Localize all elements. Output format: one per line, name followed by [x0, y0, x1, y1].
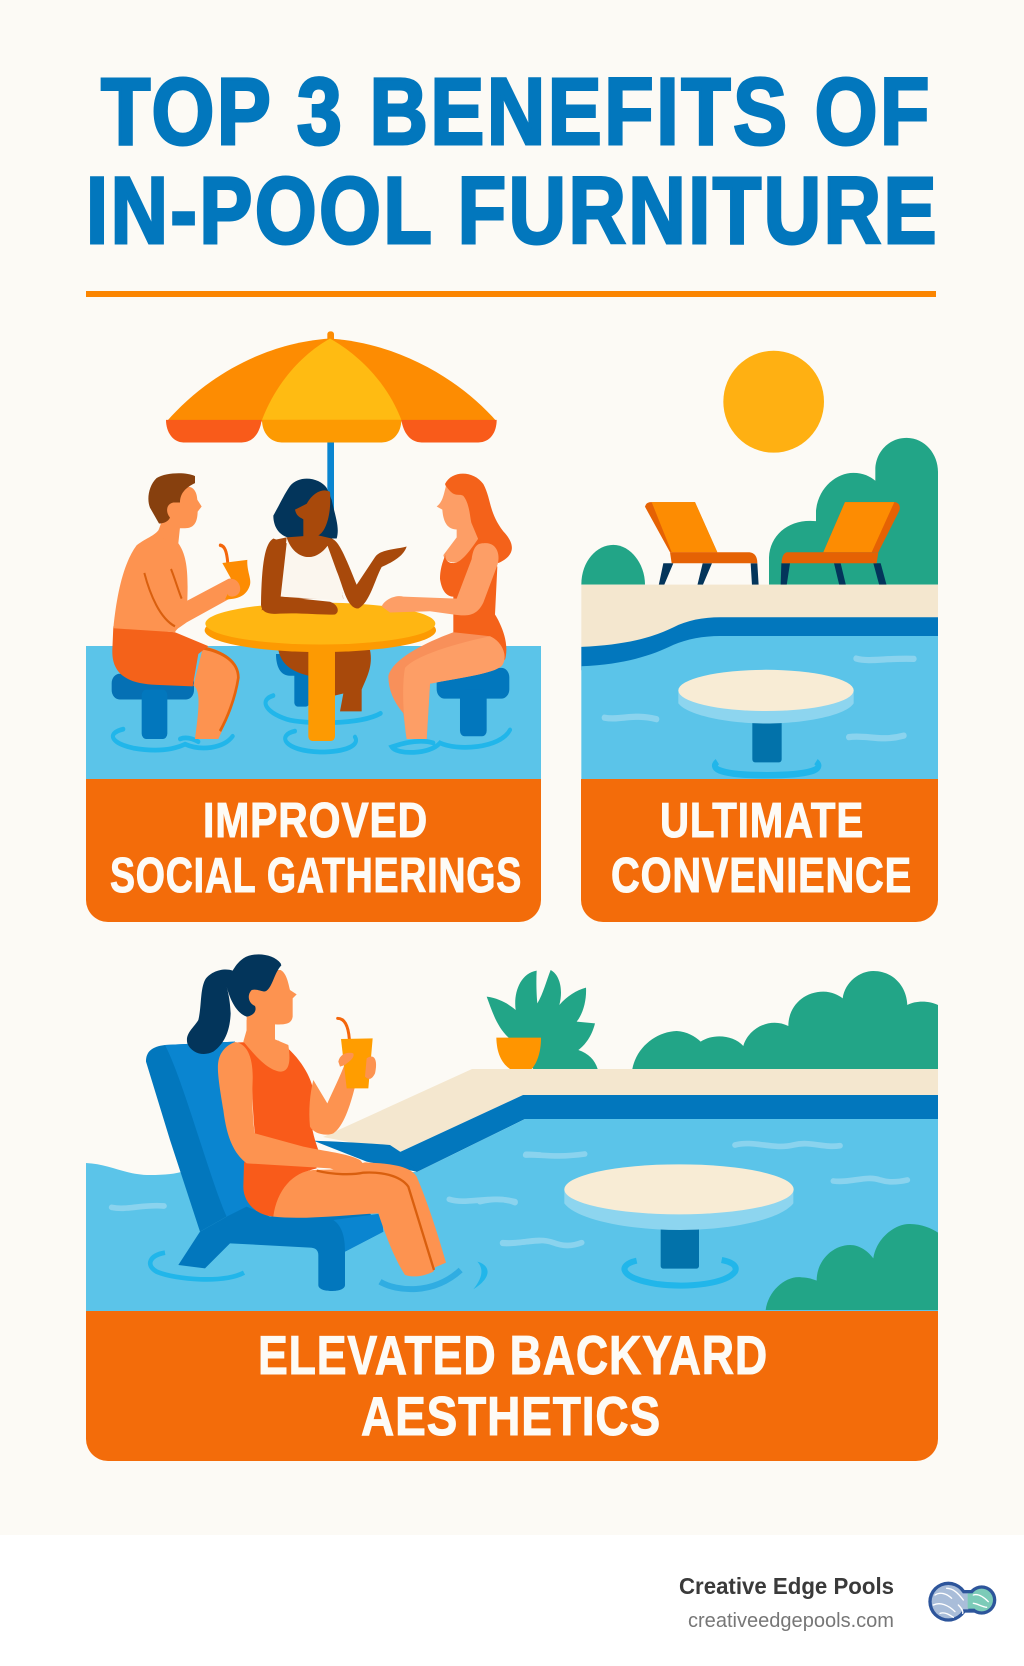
- banner text: [110, 794, 522, 903]
- deck: [323, 1069, 938, 1152]
- deck: [581, 585, 938, 655]
- center woman stool: [276, 654, 309, 707]
- man: [113, 473, 250, 632]
- center woman: [261, 479, 407, 615]
- neck and chest: [243, 1020, 289, 1072]
- panel: elevated backyard aesthetics: [86, 954, 938, 1461]
- right lounge chair: [781, 502, 900, 585]
- thigh and leg: [273, 1162, 446, 1276]
- scene: [581, 351, 938, 779]
- head: [235, 970, 297, 1043]
- table: [678, 670, 854, 762]
- panel: improved social gatherings: [86, 331, 541, 922]
- bush: foreground: [766, 1224, 938, 1310]
- banner text: ULTIMATE: [660, 794, 864, 848]
- left lounge chair: [645, 502, 759, 585]
- scene right: [480, 1144, 938, 1310]
- ripple: [625, 1260, 736, 1286]
- table leg: [308, 646, 335, 741]
- swimsuit: [233, 1041, 318, 1217]
- sun: [723, 351, 824, 453]
- banner text: CONVENIENCE: [611, 849, 912, 903]
- right arm and drink: [309, 1018, 376, 1135]
- pool edge: [581, 617, 938, 670]
- right woman: [382, 474, 512, 739]
- ripples: [113, 696, 510, 752]
- plant and bushes: [487, 970, 938, 1069]
- hair: [187, 954, 281, 1054]
- panel: ultimate convenience: [581, 351, 938, 922]
- table: [564, 1164, 794, 1269]
- woman on lounge chair: [112, 954, 540, 1291]
- footer brand: [679, 1573, 996, 1632]
- group at table: [112, 473, 512, 752]
- lounge chair: [146, 1042, 417, 1291]
- water: [581, 636, 938, 779]
- stool: right: [437, 668, 509, 736]
- bushes: [581, 438, 938, 585]
- stool: left: [112, 674, 194, 739]
- left arm: [218, 1042, 365, 1177]
- brand name: Creative Edge Pools: [679, 1573, 894, 1599]
- banner: [86, 1311, 938, 1461]
- banner text: ELEVATED BACKYARD: [258, 1324, 768, 1386]
- water: [86, 646, 541, 780]
- waves: [480, 1144, 907, 1245]
- banner text: AESTHETICS: [361, 1385, 661, 1447]
- waves: [604, 659, 914, 738]
- table top: [205, 603, 436, 652]
- ripple: [715, 762, 819, 775]
- center woman legs: [278, 650, 371, 711]
- water: [86, 1119, 938, 1311]
- banner: [581, 779, 938, 922]
- logo: [928, 1582, 996, 1622]
- brand url: creativeedgepools.com: [688, 1610, 894, 1632]
- title: [86, 59, 939, 264]
- umbrella: [166, 331, 497, 512]
- banner text: SOCIAL GATHERINGS: [110, 849, 522, 903]
- banner text: IMPROVED: [203, 794, 428, 848]
- banner text: [258, 1324, 768, 1447]
- banner text: [611, 794, 912, 903]
- ripples: [150, 1253, 244, 1279]
- pool edge: [380, 1095, 938, 1172]
- man: legs and shorts: [112, 626, 239, 739]
- waves: [112, 1154, 540, 1243]
- banner: [86, 779, 541, 922]
